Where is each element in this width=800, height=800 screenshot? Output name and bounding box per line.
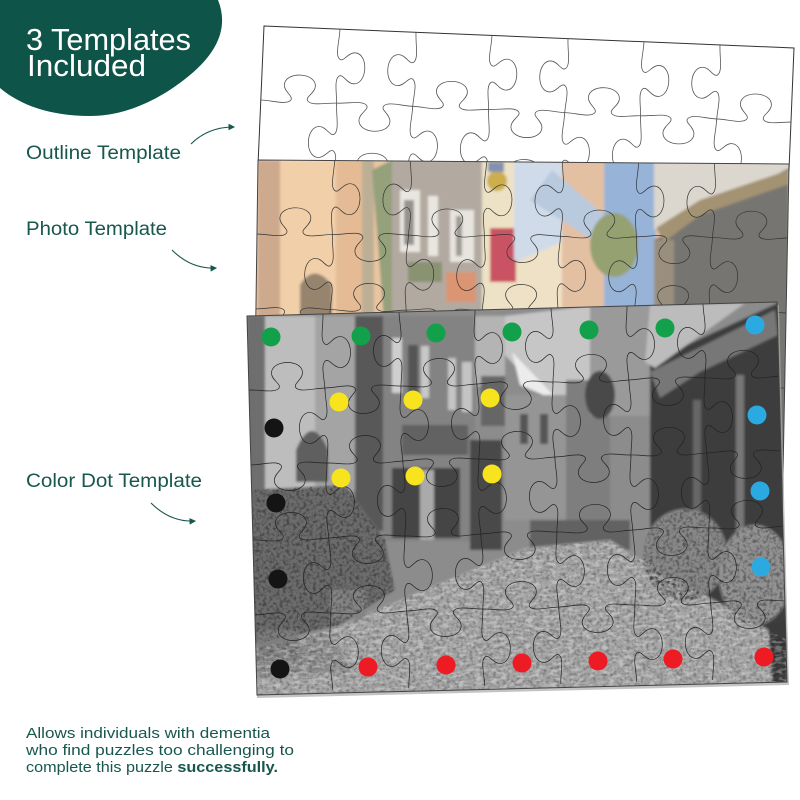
header blob with title [0,0,222,116]
green dots [262,318,674,346]
blue dots [746,316,770,576]
black dots [264,418,290,678]
caption text: complete this puzzle successfully. [26,760,278,776]
arrow: color dot template [151,503,195,521]
label: photo template: Photo Template [26,219,167,240]
yellow dots [330,388,502,488]
caption text: who find puzzles too challenging to [25,743,294,759]
panel: color dot template sheet [245,300,791,700]
header blob with title: 3 Templates [26,22,191,57]
arrow: photo template [172,250,216,268]
header blob with title: Included [27,48,146,83]
caption text: Allows individuals with dementia [26,726,271,742]
arrow: outline template [191,127,234,144]
red dots [358,648,774,676]
label: outline template: Outline Template [26,143,181,164]
label: color dot template: Color Dot Template [26,471,202,492]
grayscale street photo [245,300,791,700]
panel: photo template sheet [255,160,790,507]
caption text [25,726,294,776]
panel: outline template sheet [258,26,794,170]
